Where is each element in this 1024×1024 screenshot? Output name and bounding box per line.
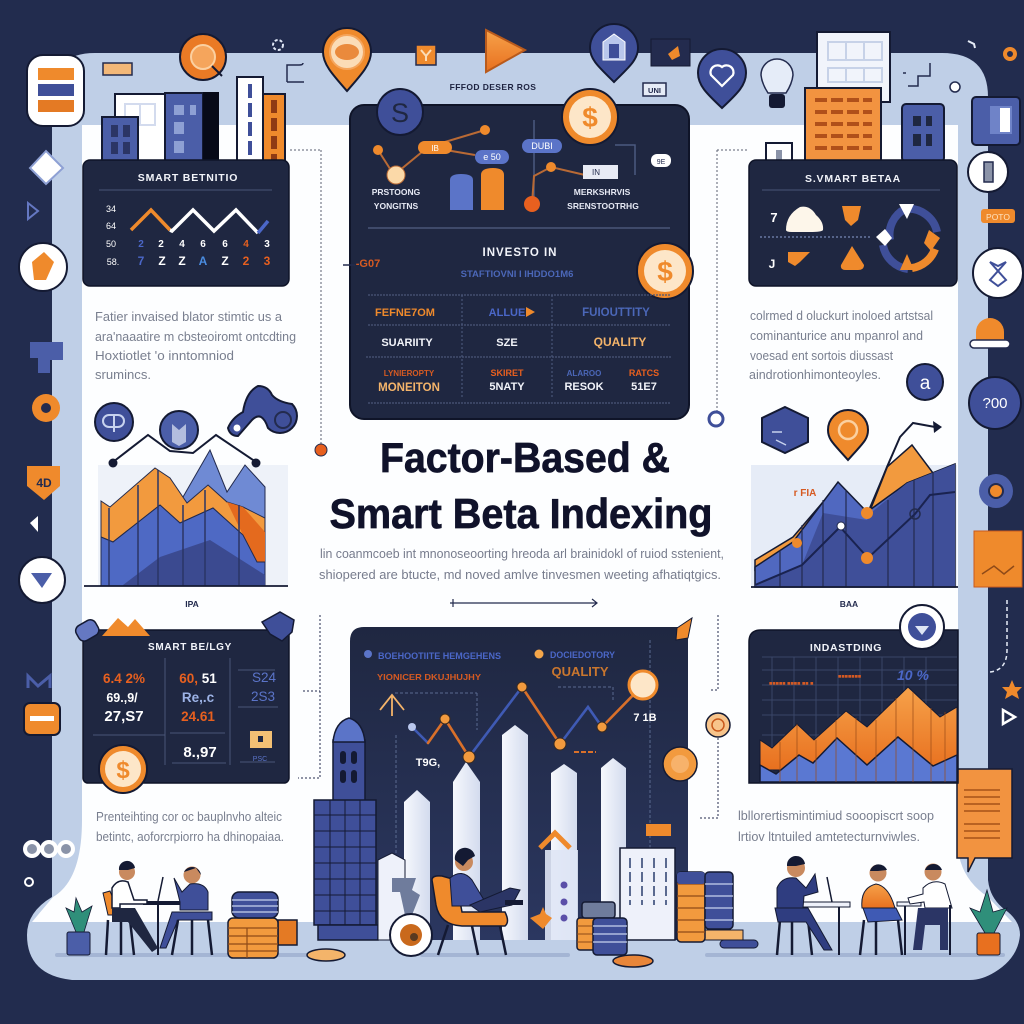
table right [897, 902, 921, 955]
chart numbers: 50 [106, 239, 116, 249]
icon: circle shield [19, 557, 65, 603]
icon: blue pin with house [590, 24, 638, 82]
text block: lower-left [96, 809, 284, 844]
table numbers: 60, 51 [179, 671, 217, 686]
panel: smart beta lower-left [73, 612, 294, 793]
chart label: IPA [185, 599, 199, 609]
text: left caption: YONGITNS [374, 201, 419, 211]
factor table text: ALLUE [489, 307, 525, 319]
table numbers: PSC [253, 756, 267, 763]
chart numbers: 7 [138, 254, 145, 268]
icon: step line [287, 63, 304, 82]
icon: small square tag [416, 45, 436, 65]
connector dashed [298, 615, 320, 778]
panel: smart beta top-right: J [769, 257, 775, 271]
panel: center bottom chart dark: BOEHOOTIITE HEMGEHENS [378, 651, 501, 661]
icon: coin on chart [629, 671, 657, 699]
tag: r FIA [794, 488, 816, 499]
icon: small ring [25, 878, 33, 886]
icon: heart pin [698, 49, 746, 108]
icon: blue S coin [377, 89, 423, 135]
dash tag [574, 751, 596, 753]
factor table text: 51E7 [631, 381, 657, 393]
table numbers: S24 [252, 670, 276, 685]
icon: triangle outline [28, 203, 38, 219]
white house structure [378, 853, 420, 940]
icon: knot circle [973, 248, 1023, 298]
table numbers: 69.,9/ [106, 691, 138, 705]
tiny header label: FFFOD DESER ROS [450, 82, 536, 92]
chart numbers: 2 [158, 239, 164, 250]
chart label: BAA [840, 599, 858, 609]
person orange shirt [860, 864, 902, 955]
double arrow [450, 599, 597, 607]
text: right caption [567, 187, 639, 211]
white content area [32, 125, 1012, 922]
icon: dollar coin: $ [116, 757, 130, 784]
person: center in orange chair [432, 848, 523, 955]
person white shirt [908, 864, 952, 955]
intro text [319, 546, 724, 582]
icon: blue number circle: ?00 [982, 395, 1008, 412]
heading: invest in: INVESTO IN [483, 247, 557, 259]
person right blue [160, 866, 212, 955]
left area chart [84, 386, 297, 609]
table numbers: 8.,97 [183, 744, 217, 761]
table numbers: 6.4 2% [103, 671, 145, 686]
icon: blue letter circle: a [920, 373, 931, 394]
icon: cylinder circle [968, 152, 1008, 192]
icon: dollar coin mid: $ [657, 256, 673, 287]
icon: orange folder [974, 531, 1022, 587]
icon: shield [27, 466, 60, 500]
buildings behind right panel [766, 32, 944, 162]
divider [368, 227, 670, 229]
factor table text: 5NATY [489, 381, 525, 393]
right side icons [957, 152, 1023, 872]
factor table text: FUIOUTTITY [582, 307, 650, 319]
icon: orange label: POTO [986, 212, 1010, 222]
table numbers: 24.61 [181, 709, 215, 724]
text block: right top: voesad ent sortois diussast [750, 348, 893, 363]
text: right caption: SRENSTOOTRHG [567, 201, 639, 211]
plant left [66, 898, 92, 955]
panel: center bottom chart dark: DOCIEDOTORY [550, 650, 615, 660]
line over chart [113, 435, 256, 462]
icon: puzzle [262, 612, 294, 641]
text block: lower-right [738, 808, 934, 844]
text: right caption: MERKSHRVIS [574, 187, 631, 197]
text block: left top: Hoxtiotlet 'o inntomniod [95, 348, 234, 363]
panel: indexing lower-right: ■■■■■■■ [838, 674, 861, 680]
table numbers: 2S3 [251, 689, 275, 704]
panel: indexing lower-right [749, 605, 958, 783]
text: left caption [372, 187, 421, 211]
chart numbers: 4 [179, 239, 185, 250]
text block: right top: cominanturice anu mpanrol and [750, 328, 923, 343]
dashed connectors [290, 150, 321, 445]
table numbers [103, 670, 276, 763]
icon: dollar coin [99, 745, 147, 793]
text block: left top: srumincs. [95, 367, 151, 382]
factor table text: QUALITY [594, 335, 646, 349]
text block: lower-left: betintc, aoforcrpiorro ha dhinopaiaa. [96, 829, 284, 844]
text block: left top: ara'naaatire m cbsteoiromt ontcdting [95, 329, 296, 344]
title: Factor-Based & [380, 434, 670, 481]
icon: coins right of center [663, 713, 730, 781]
sublabels: QUALITY [551, 664, 609, 679]
right network chart: 9E [657, 159, 666, 166]
chart numbers: 6 [200, 239, 206, 250]
panel: center top dark [350, 89, 693, 419]
text block: right top: colrmed d oluckurt inoloed artstsal [750, 308, 933, 323]
text block: right top: aindrotionhimonteoyles. [749, 367, 881, 382]
icon: eye disc [390, 914, 432, 956]
icon: orange badge [180, 34, 226, 80]
factor table text: FEFNE7OM [375, 307, 435, 319]
area chart [760, 687, 957, 770]
left network chart [373, 125, 509, 184]
text: left caption: PRSTOONG [372, 187, 421, 197]
bars [404, 725, 626, 940]
chart numbers: 2 [138, 239, 144, 250]
chart numbers: 58. [107, 257, 119, 267]
intro text: lin coanmcoeb int mnonoseoorting hreoda arl brainidokl of ruiod sstenient, [320, 546, 724, 561]
factor table text: RESOK [564, 381, 604, 393]
buildings behind left panel [102, 77, 285, 162]
icon: blue block [30, 342, 63, 373]
small label box [643, 83, 666, 96]
icon: blue letter circle [907, 364, 943, 400]
chart numbers: T9G, [416, 757, 440, 769]
coin stacks left [228, 892, 345, 961]
left network chart: IB [431, 144, 439, 153]
factor table text: ALAROO [567, 369, 601, 378]
corner tag [676, 618, 692, 640]
text block: left top [95, 309, 296, 382]
factor table text [375, 307, 659, 394]
coin stacks center right [577, 872, 758, 967]
people: right group [775, 856, 952, 955]
plant right [970, 890, 1007, 955]
chart numbers: 2 [243, 254, 250, 268]
panel: center bottom chart dark: YIONICER DKUJHUJHY [377, 672, 481, 682]
table numbers: Re,.c [182, 690, 215, 705]
icon: shield: 4D [36, 476, 52, 490]
grid [762, 657, 957, 780]
icon: blue S coin: S [391, 98, 409, 128]
icon: dotted ring [273, 40, 283, 50]
icon: target circle [900, 605, 944, 649]
chart numbers: Z [178, 254, 186, 268]
curved dashed line [990, 600, 1007, 672]
icon: dollar coin top: $ [582, 102, 598, 133]
tall tower [314, 718, 378, 940]
factor table grid [366, 295, 672, 403]
factor table text: SUARIITY [381, 337, 433, 349]
icon: wrench [228, 386, 297, 436]
small square icon [250, 731, 272, 748]
small pale building with arrow [530, 833, 578, 940]
icon: orange document callout [957, 769, 1012, 872]
bar pair [450, 168, 504, 210]
icon: small triangle [30, 516, 38, 532]
icon: dark tag [651, 39, 690, 66]
table numbers: 27,S7 [104, 708, 144, 725]
icon: stair line [903, 63, 930, 86]
heading: S.VMART BETAA [805, 173, 901, 185]
tag: small orange label [103, 63, 132, 75]
table [143, 877, 185, 955]
numbers: 7 [770, 210, 778, 225]
icon: orange shape in circle [19, 243, 67, 291]
dashed guides [395, 640, 650, 860]
left network chart: e 50 [483, 152, 501, 162]
icon: orange label [981, 209, 1015, 223]
icon: blue number circle [969, 377, 1021, 429]
connector dashed right [700, 615, 718, 818]
small red labels: ■■■■■ ■■■■ ■■ ■ [769, 681, 813, 687]
factor table text: RATCS [629, 368, 659, 378]
icon: orange pin [828, 410, 868, 460]
icon shapes [786, 207, 823, 232]
icon: gear [32, 394, 60, 422]
chart numbers: 4 [243, 239, 249, 250]
right area chart [751, 407, 958, 609]
ring chart [883, 209, 937, 269]
label: 10 % [897, 667, 929, 683]
icon: cube [762, 407, 808, 453]
factor table text: SKIRET [490, 368, 524, 378]
small label box: UNI [648, 86, 661, 95]
zigzag line chart [131, 210, 268, 233]
label: left number with marker [343, 258, 380, 270]
person seated blue [775, 856, 832, 955]
icon: small orange eye [1003, 47, 1017, 61]
legend text [364, 650, 372, 658]
chart numbers [106, 204, 271, 268]
icon: mountains and tag [73, 618, 150, 643]
icon: orange pin [323, 28, 371, 91]
factor table text: LYNIEROPTY [384, 369, 435, 378]
right network chart: IN [592, 168, 600, 177]
line chart [412, 685, 643, 757]
text block: left top: Fatier invaised blator stimtic us a [95, 309, 283, 324]
chart numbers: Z [158, 254, 166, 268]
heading: INDASTDING [810, 642, 882, 654]
icon: chain of rings [25, 842, 73, 856]
chart numbers: 34 [106, 204, 116, 214]
intro text: shiopered are btucte, md noved amlve tinvesmen weeting afhatiqtgics. [319, 567, 721, 582]
people: left table [103, 861, 212, 955]
icon: white curl [968, 41, 975, 48]
top icons row [27, 24, 1017, 126]
heading: SMART BE/LGY [148, 642, 232, 653]
person left white shirt [103, 861, 158, 955]
icon: light bulb [761, 59, 793, 108]
factor table text: SZE [496, 337, 518, 349]
chart numbers: A [199, 254, 208, 268]
icon: diamond [30, 151, 63, 184]
text block: lower-right: lrtiov ltntuiled amtetecturnviwles. [738, 829, 920, 844]
text block: lower-left: Prenteihting cor oc bauplnvho alteic [96, 809, 282, 824]
chart numbers: 3 [264, 239, 270, 250]
icon: dollar coin top [562, 89, 618, 145]
icon: chevron [28, 676, 50, 688]
icon: menu card [27, 55, 84, 126]
text block: lower-right: lbllorertismintimiud sooopiscrt soop [738, 808, 934, 823]
panel: center bottom chart dark [350, 618, 692, 940]
icon: book card [972, 97, 1020, 145]
connector node blue [709, 412, 723, 426]
connector node orange [315, 444, 327, 456]
icon: blue circles [95, 403, 133, 441]
icon: star [1002, 680, 1022, 699]
label: left number with marker: -G07 [356, 258, 380, 270]
text block: right top [749, 308, 933, 382]
chart numbers: 64 [106, 221, 116, 231]
arrow marker [380, 695, 404, 716]
title: Smart Beta Indexing [330, 490, 712, 537]
chart numbers: Z [221, 254, 229, 268]
icon: blue ring [979, 474, 1013, 508]
desk left [803, 877, 850, 955]
icon: orange button [24, 703, 60, 735]
icon: small ring [950, 82, 960, 92]
icon: orange bell [970, 318, 1010, 348]
left side icons [19, 151, 73, 886]
heading: SMART BETNITIO [138, 172, 238, 184]
floor shadow [55, 953, 1005, 957]
title [330, 434, 712, 537]
right network chart [522, 120, 671, 212]
subheading: STAFTIOVNI I IHDDO1M6 [461, 269, 573, 280]
icon: small arrow [1003, 710, 1015, 724]
small white building [620, 824, 675, 940]
chart numbers: 3 [264, 254, 271, 268]
factor table text: MONEITON [378, 382, 440, 394]
right network chart: DUBI [531, 141, 553, 151]
panel: center bottom chart dark: 7 1B [633, 712, 657, 724]
icon: play arrow [486, 30, 525, 72]
chart numbers: 6 [222, 239, 228, 250]
icon: dollar coin mid [637, 243, 693, 299]
panel: smart beta top-right [749, 160, 957, 286]
panel: smart beta top-left [83, 160, 289, 286]
